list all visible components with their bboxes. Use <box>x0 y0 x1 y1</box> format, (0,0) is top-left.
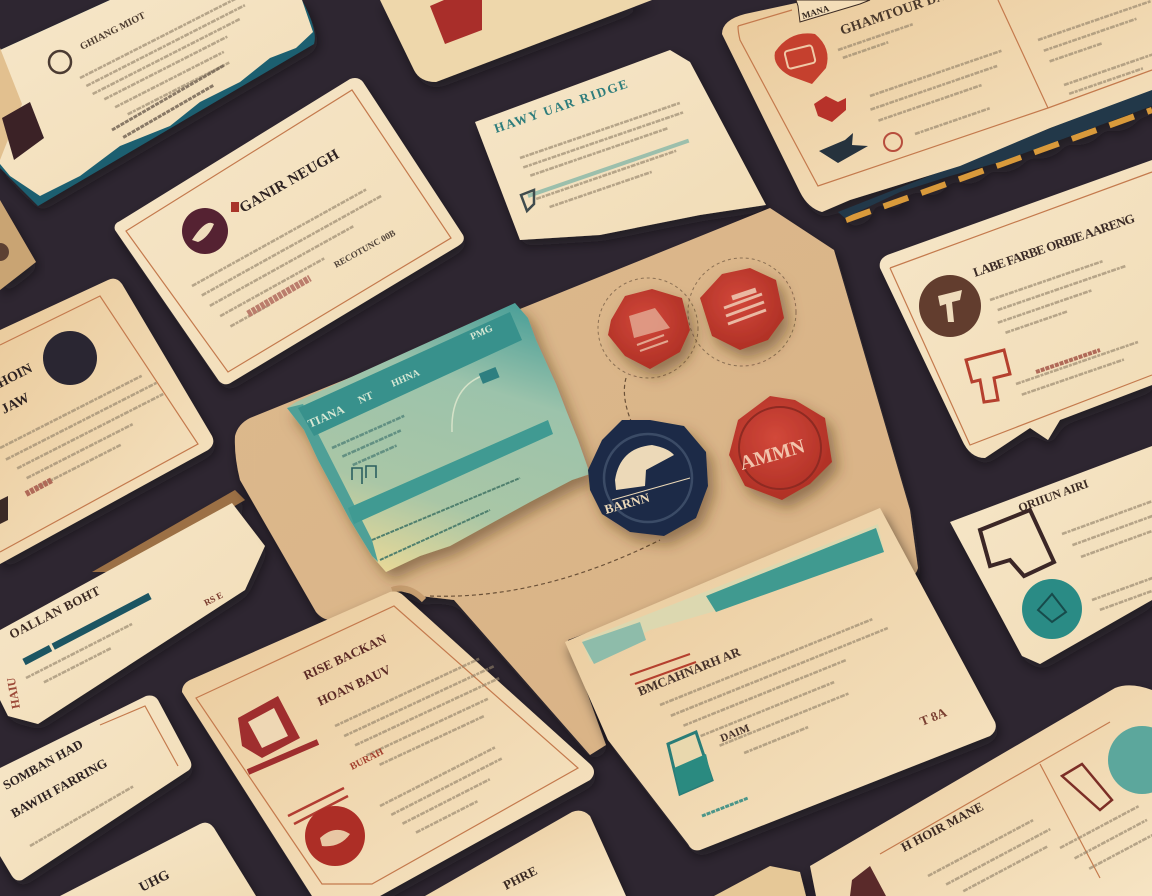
icon: red tool <box>1062 764 1112 810</box>
heading: PHRE <box>501 863 540 893</box>
heading tab <box>796 0 870 22</box>
text line accent <box>112 65 231 140</box>
heading: SOMBAN HAD <box>0 736 85 793</box>
red text <box>26 480 52 494</box>
flap fold <box>392 588 424 600</box>
icon: bag <box>2 102 44 160</box>
red stroke <box>288 788 348 824</box>
wax seal: red right <box>700 268 784 350</box>
heading: GANIR NEUGH <box>237 146 342 216</box>
icon: teal circle <box>1022 579 1082 639</box>
red text <box>1036 350 1100 372</box>
small icon <box>0 496 8 524</box>
card: left dark icon <box>0 279 213 564</box>
text lines <box>520 103 699 211</box>
card: top left <box>0 0 315 206</box>
heading: HAWY UAR RIDGE <box>492 76 629 136</box>
seal text: AMMN <box>737 435 808 475</box>
stamp: teal ticket: HHNA <box>390 367 422 390</box>
card: bottom center left <box>182 592 594 896</box>
icon: dark arrow <box>850 866 886 896</box>
card: circle logo <box>115 78 464 384</box>
icon: maroon circle <box>182 208 228 254</box>
icon: bicycle <box>49 51 71 73</box>
text lines <box>660 615 911 775</box>
card: bottom right <box>810 685 1152 896</box>
footer <box>702 798 748 816</box>
card: top center <box>380 0 652 82</box>
teal header band <box>298 312 522 436</box>
heading: BMCAHNARH AR <box>636 644 743 699</box>
card: left dark icon: JAW <box>0 391 32 418</box>
wax seal: red lower right <box>729 396 832 500</box>
teal banner <box>582 524 884 662</box>
card: right large <box>880 160 1152 458</box>
seal text: BARNN <box>603 490 652 517</box>
stamp curve <box>452 372 496 432</box>
icon: shield <box>521 190 534 211</box>
lower stamp lines <box>372 478 520 560</box>
side note: RECOTUNC 00B <box>332 228 397 270</box>
icon: brown hammer circle <box>919 275 981 337</box>
teal left frame <box>287 404 378 562</box>
card: top middle teal heading <box>475 50 766 240</box>
heading: LABE FARBE ORBIE AARENG <box>971 210 1137 280</box>
card: bottom left: BAWIH FARRING <box>8 755 110 821</box>
card: bottom tiny <box>714 866 806 896</box>
icon: red seal <box>775 33 828 84</box>
heading: H HOIR MANE <box>898 799 986 855</box>
card: bottom center large <box>565 508 996 850</box>
card: left edge tan <box>0 200 36 290</box>
red strokes <box>630 654 696 684</box>
stamp: teal ticket <box>287 303 590 572</box>
text lines <box>928 815 1057 896</box>
side label: RS E <box>202 590 225 608</box>
card: bottom center left: HOAN BAUV <box>315 661 393 709</box>
heading: GHIANG MIOT <box>78 10 148 53</box>
card: right second <box>950 446 1152 664</box>
icon: navy arrow <box>819 133 868 163</box>
envelope <box>235 208 918 755</box>
icon: dark helmet <box>43 331 97 385</box>
card: bottom left <box>0 696 191 880</box>
icon: red seal <box>305 806 365 866</box>
red text <box>248 278 310 314</box>
page number: T 8A <box>918 704 949 729</box>
red mark <box>231 202 239 212</box>
card: top right: MANA <box>801 3 831 21</box>
icon: red outline <box>884 133 902 151</box>
highlighted bar <box>528 141 689 196</box>
heading: OALLAN BOHT <box>7 583 103 642</box>
teal middle band <box>348 420 553 524</box>
text lines <box>335 654 512 775</box>
stamp text <box>332 415 415 470</box>
navy bar <box>24 596 150 662</box>
card: bottom left small <box>60 823 256 896</box>
wax seal: red left <box>608 289 690 369</box>
text lines <box>866 50 1011 122</box>
text lines <box>0 371 175 494</box>
text lines <box>30 786 134 846</box>
icon: red emblem <box>430 0 482 44</box>
torn gold edge <box>846 110 1152 220</box>
icon: red tool <box>966 350 1010 402</box>
stamp: teal ticket: PMG <box>469 323 495 343</box>
icon: dark tool <box>980 510 1054 576</box>
label: DAIM <box>719 722 752 745</box>
wax seal: navy <box>588 420 708 536</box>
vertical label: HAIU <box>4 676 23 710</box>
heading: UHG <box>137 868 172 896</box>
card: top right <box>722 0 1152 220</box>
text lines <box>990 254 1134 334</box>
text lines <box>192 184 402 333</box>
text lines <box>1062 500 1152 560</box>
stamp icon <box>352 466 376 484</box>
icon: teal lantern <box>668 732 712 794</box>
card: left strip with tab <box>0 490 265 724</box>
heading: RISE BACKAN <box>301 631 389 683</box>
icon: teal circle <box>1108 726 1152 794</box>
stamp: teal ticket: NT <box>356 389 376 407</box>
text lines <box>80 0 265 126</box>
card: bottom center small <box>425 811 626 896</box>
dashed route <box>430 378 660 596</box>
text lines <box>26 624 138 689</box>
icon: red machine <box>238 696 300 758</box>
icon: red heart <box>814 96 846 122</box>
torn navy edge <box>838 88 1152 218</box>
label: BURAH <box>348 746 386 773</box>
stamp labels: TIANA <box>306 402 347 431</box>
heading: ORIIUN AIRI <box>1016 476 1091 515</box>
